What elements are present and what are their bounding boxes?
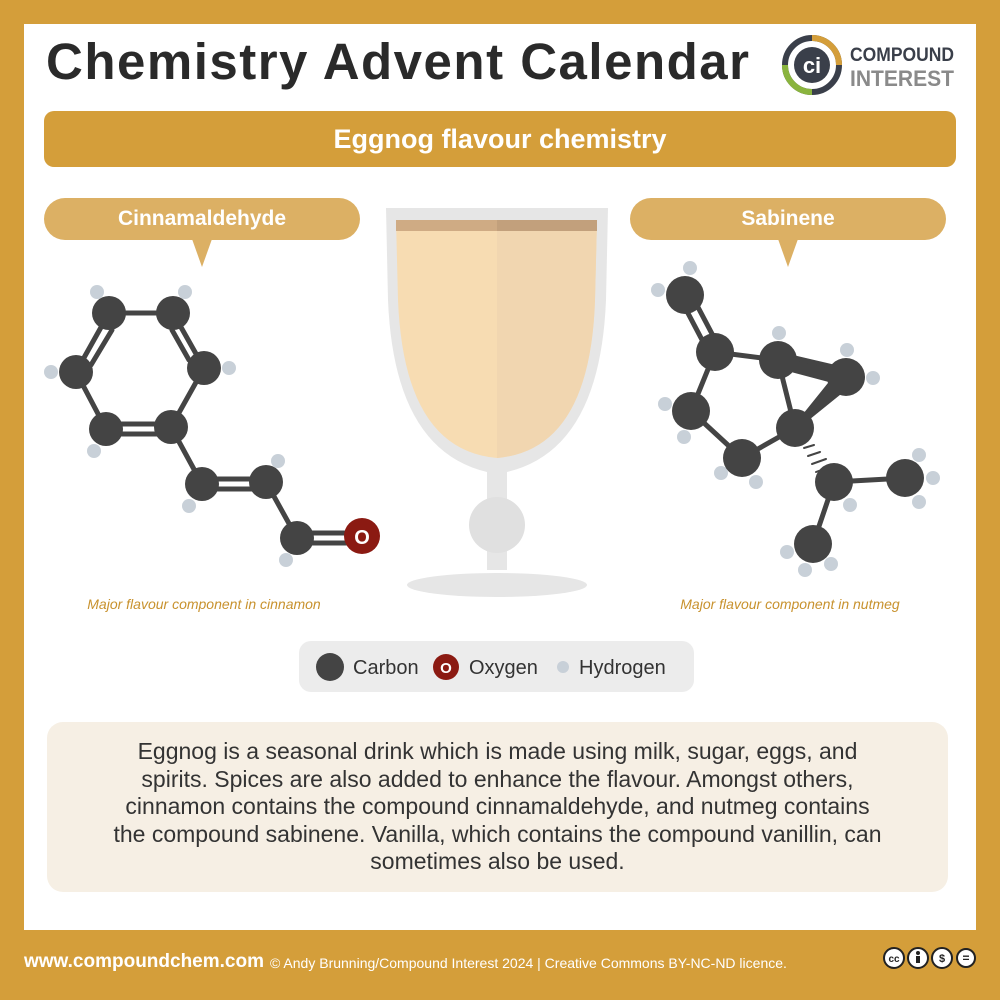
logo <box>782 35 955 95</box>
molecule: cinnamaldehyde: O <box>354 527 370 549</box>
description text block: the compound sabinene. Vanilla, which contains the compound vanillin, can <box>113 820 882 846</box>
title: Chemistry Advent Calendar <box>46 33 750 90</box>
licence icons: = <box>962 951 970 965</box>
licence icons: $ <box>939 953 945 965</box>
legend: O <box>440 660 452 677</box>
licence icons <box>883 947 976 969</box>
caption: nutmeg: Major flavour component in nutmeg <box>680 596 900 612</box>
legend <box>299 641 694 692</box>
label: Cinnamaldehyde <box>44 198 360 267</box>
label: Sabinene: Sabinene <box>741 207 835 230</box>
licence icons: cc <box>888 954 900 965</box>
molecule: cinnamaldehyde <box>44 285 380 567</box>
description text block <box>47 722 948 892</box>
logo: ci <box>803 53 821 78</box>
footer: credits: © Andy Brunning/Compound Interest 2024 | Creative Commons BY-NC-ND licence. <box>270 955 787 971</box>
description text block: cinnamon contains the compound cinnamaldehyde, and nutmeg contains <box>125 793 870 819</box>
footer: website: www.compoundchem.com <box>24 951 264 972</box>
description text block: spirits. Spices are also added to enhance the flavour. Amongst others, <box>141 766 854 792</box>
label: Sabinene <box>630 198 946 267</box>
subtitle banner: Eggnog flavour chemistry <box>333 124 667 154</box>
logo: COMPOUND <box>850 45 954 66</box>
logo: INTEREST <box>850 66 955 91</box>
molecule: sabinene <box>651 261 940 577</box>
description text block: sometimes also be used. <box>370 848 625 874</box>
caption: cinnamon: Major flavour component in cinnamon <box>87 596 321 612</box>
legend: Oxygen <box>469 657 538 679</box>
legend: Hydrogen <box>579 657 666 679</box>
legend: Carbon <box>353 657 419 679</box>
eggnog glass <box>386 208 608 597</box>
label: Cinnamaldehyde: Cinnamaldehyde <box>118 207 286 230</box>
description text block: Eggnog is a seasonal drink which is made using milk, sugar, eggs, and <box>138 738 857 764</box>
subtitle banner <box>44 111 956 167</box>
